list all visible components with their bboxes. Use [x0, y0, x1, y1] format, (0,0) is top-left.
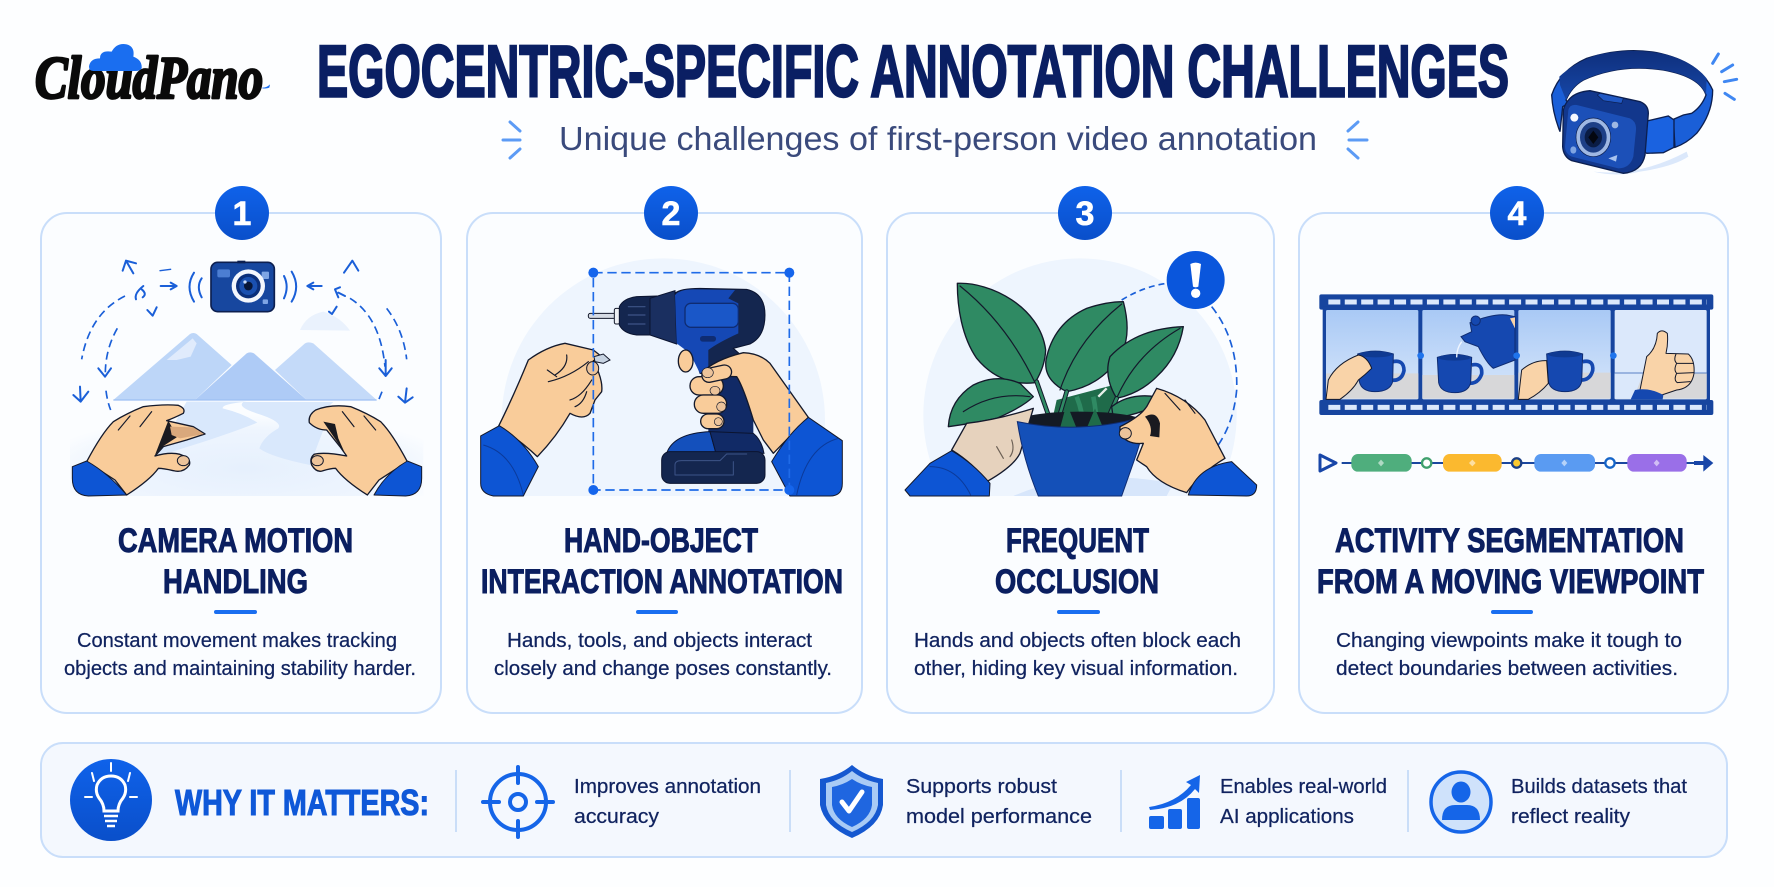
panel: hand-object interaction annotation — [467, 186, 862, 713]
icon: subtitle right accent — [1348, 122, 1367, 158]
text: supports robust model performance — [906, 775, 1092, 828]
number badge 4 — [1490, 186, 1544, 240]
panel: camera motion handling — [41, 186, 441, 713]
text: supports robust model performance: model performance — [906, 805, 1092, 828]
text: improves annotation accuracy: accuracy — [574, 805, 660, 828]
heading — [118, 522, 353, 601]
number badge 3: 3 — [1076, 195, 1094, 233]
mug and kettle in frame 2 — [1437, 315, 1515, 393]
thumbs up in frame 4 — [1631, 331, 1694, 399]
number badge 1: 1 — [233, 195, 251, 233]
description — [64, 629, 416, 680]
panel: why it matters — [41, 743, 1727, 857]
heading — [995, 522, 1159, 601]
heading: HAND-OBJECT — [564, 522, 758, 560]
card 4 background — [1299, 213, 1728, 713]
text: supports robust model performance: Supports robust — [906, 775, 1057, 798]
text: builds datasets that reflect reality: Builds datasets that — [1511, 775, 1687, 798]
bottom panel background — [41, 743, 1727, 857]
card 2 background — [467, 213, 862, 713]
heading: HANDLING — [163, 563, 308, 601]
icon: subtitle left accent — [503, 122, 520, 158]
heading — [481, 522, 843, 601]
description: closely and change poses constantly. — [494, 657, 832, 680]
text: enables real-world AI applications — [1220, 775, 1387, 828]
subtitle: Unique challenges of first-person video annotation — [559, 120, 1317, 157]
illustration: hands with drill — [480, 258, 843, 496]
description: Constant movement makes tracking — [77, 629, 397, 652]
illustration: plant occluded by hands — [904, 251, 1258, 496]
description: Hands and objects often block each — [914, 629, 1241, 652]
card 1 background — [41, 213, 441, 713]
icon: logo cloud — [89, 44, 270, 89]
heading: ACTIVITY SEGMENTATION — [1335, 522, 1684, 560]
icon: wrist-mounted camera — [1552, 51, 1737, 174]
description — [1336, 629, 1682, 680]
number badge 1 — [215, 186, 269, 240]
panel: frequent occlusion — [887, 186, 1274, 713]
text: improves annotation accuracy — [574, 775, 761, 828]
description: Changing viewpoints make it tough to — [1336, 629, 1682, 652]
card 3 background — [887, 213, 1274, 713]
description: objects and maintaining stability harder. — [64, 657, 416, 680]
text: improves annotation accuracy: Improves annotation — [574, 775, 761, 798]
illustration: moving camera and hands — [70, 261, 423, 496]
description: detect boundaries between activities. — [1336, 657, 1678, 680]
icon: shield — [820, 765, 883, 838]
heading: why it matters: WHY IT MATTERS: — [175, 782, 429, 823]
heading: OCCLUSION — [995, 563, 1159, 601]
icon: light bulb — [70, 759, 152, 841]
heading: INTERACTION ANNOTATION — [481, 563, 843, 601]
description — [494, 629, 832, 680]
panel: activity segmentation — [1299, 186, 1728, 713]
logo: CloudPano — [35, 44, 270, 111]
text: enables real-world AI applications: AI applications — [1220, 805, 1354, 828]
number badge 3 — [1058, 186, 1112, 240]
timeline — [1320, 454, 1713, 472]
number badge 2: 2 — [662, 195, 680, 233]
heading: CAMERA MOTION — [118, 522, 353, 560]
number badge 4: 4 — [1508, 195, 1527, 233]
illustration: film strip — [1319, 294, 1713, 415]
logo wordmark: CloudPano — [35, 45, 263, 111]
description: other, hiding key visual information. — [914, 657, 1238, 680]
icon: target — [483, 767, 553, 837]
description — [914, 629, 1241, 680]
heading — [1317, 522, 1704, 601]
icon: rising chart — [1149, 775, 1200, 829]
text: builds datasets that reflect reality — [1511, 775, 1687, 828]
icon: person — [1431, 772, 1491, 832]
heading: FREQUENT — [1006, 522, 1149, 560]
description: Hands, tools, and objects interact — [507, 629, 812, 652]
text: builds datasets that reflect reality: reflect reality — [1511, 805, 1631, 828]
number badge 2 — [644, 186, 698, 240]
mug in frame 1 — [1326, 351, 1404, 399]
text: enables real-world AI applications: Enables real-world — [1220, 775, 1387, 798]
mug and hand in frame 3 — [1518, 351, 1593, 399]
